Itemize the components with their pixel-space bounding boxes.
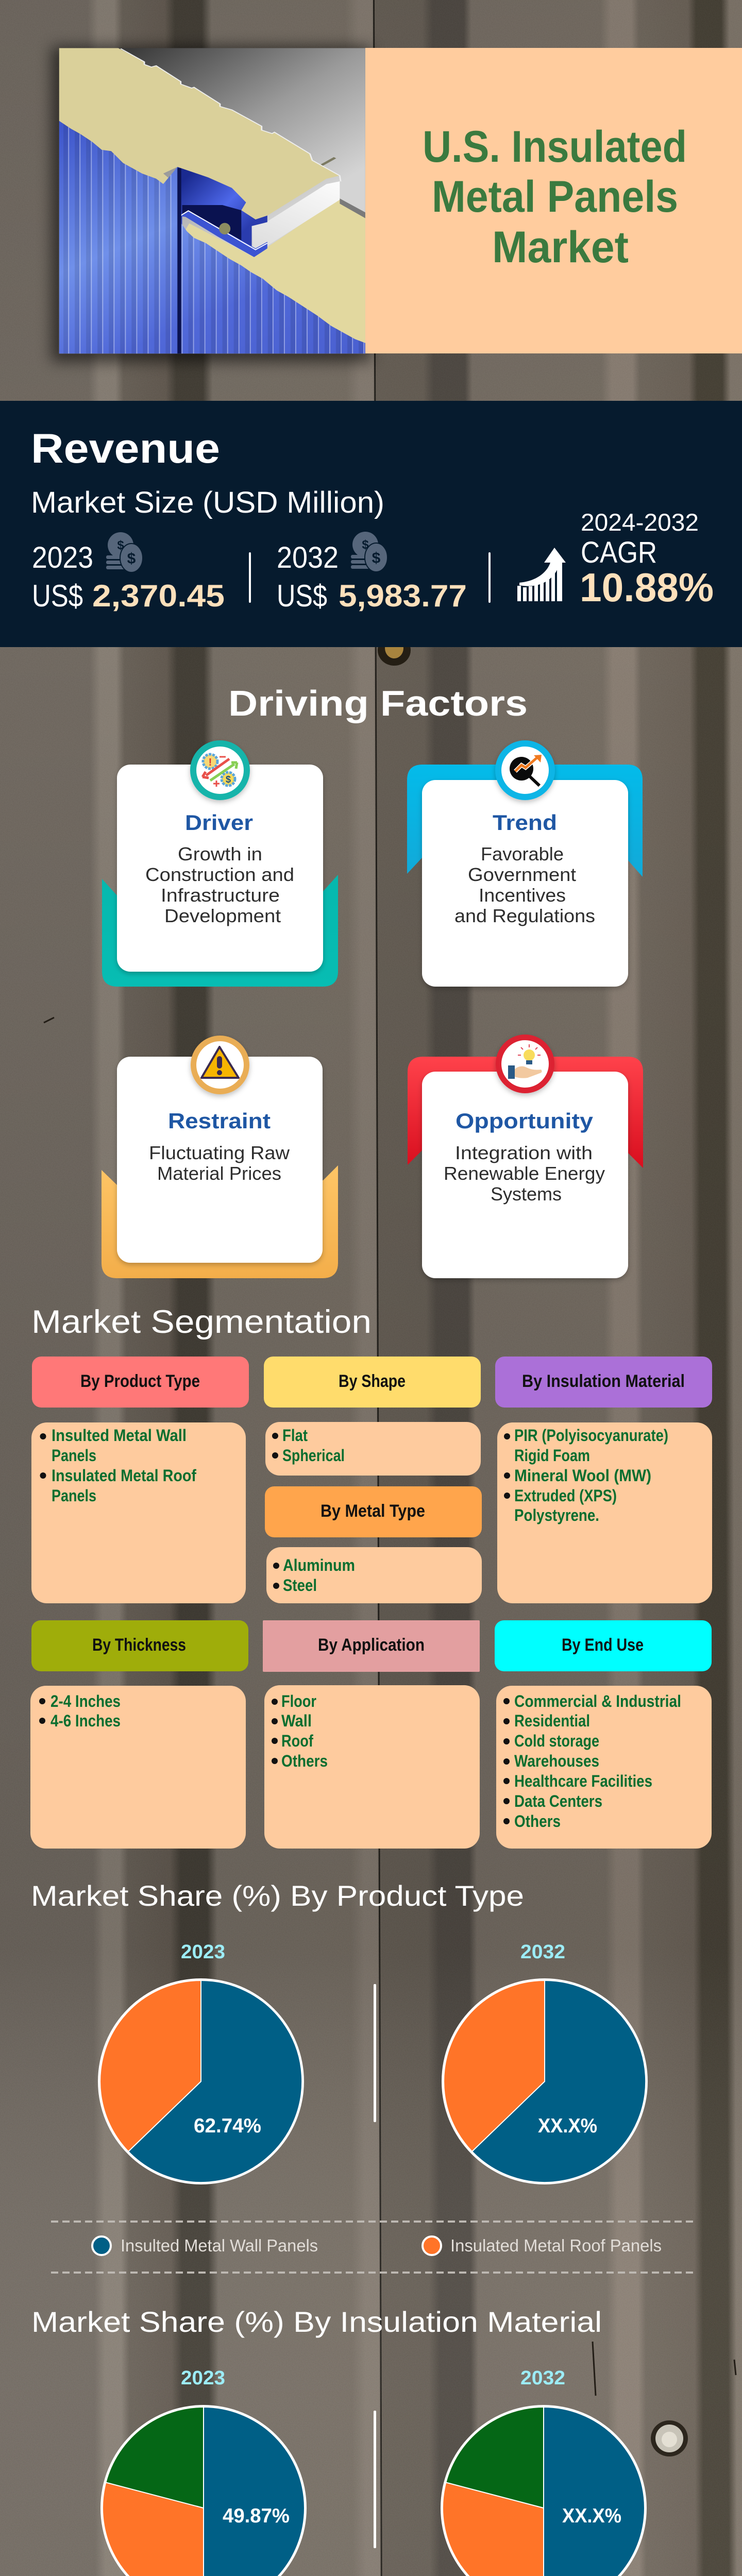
title text: Market: [492, 223, 629, 272]
list: end uses: Data Centers: [514, 1792, 602, 1810]
title text: [423, 122, 687, 272]
heading: market share by product type: Market Share (%) By Product Type: [31, 1879, 524, 1912]
icon: driver: !: [209, 757, 212, 768]
title background: [365, 48, 742, 353]
list: end uses: Others: [514, 1812, 561, 1831]
card: driver: [102, 740, 338, 987]
value 2023: 2,370.45: [92, 579, 225, 613]
label: by end use: By End Use: [562, 1635, 644, 1655]
list: applications: Floor: [281, 1692, 316, 1710]
card text: restraint: Fluctuating Raw: [149, 1142, 290, 1163]
list: applications: Roof: [281, 1732, 313, 1750]
card: restraint: [102, 1036, 338, 1278]
legend: product type: Insulted Metal Wall Panels: [121, 2236, 318, 2255]
cagr label: CAGR: [581, 536, 657, 569]
icon: coins 2032: $: [372, 550, 381, 567]
divider: [374, 2411, 376, 2548]
year label: 2023: 2023: [181, 1941, 225, 1963]
panel: by metal type: [265, 1486, 482, 1603]
list: insulation materials: Rigid Foam: [514, 1446, 590, 1465]
heading: market segmentation: Market Segmentation: [31, 1304, 372, 1340]
heading: driving factors: Driving Factors: [228, 683, 528, 723]
list: insulation materials: Mineral Wool (MW): [514, 1466, 651, 1485]
card text: restraint: [149, 1142, 290, 1184]
list: thickness: 2-4 Inches: [50, 1692, 121, 1710]
card text: trend: Favorable: [481, 843, 564, 865]
cagr period: 2024-2032: [581, 509, 699, 536]
pie chart: insulation material 2032: XX.X%: [562, 2505, 621, 2527]
panel: by end use: [495, 1620, 712, 1849]
card title: driver: Driver: [185, 810, 253, 835]
list: metal types: Aluminum: [283, 1556, 355, 1574]
label: by thickness: By Thickness: [92, 1635, 186, 1655]
card text: opportunity: [444, 1142, 605, 1205]
divider: [374, 1984, 376, 2122]
value 2032: US$: [277, 579, 327, 613]
list: product types: Insulted Metal Wall: [52, 1426, 187, 1445]
card: trend: [407, 740, 643, 987]
label: by metal type: By Metal Type: [321, 1501, 425, 1521]
icon: coins 2023: $: [117, 538, 124, 552]
legend: product type: [92, 2236, 662, 2255]
year label: 2032: 2032: [520, 1941, 565, 1963]
card text: driver: Construction and: [145, 864, 294, 885]
list: end uses: Healthcare Facilities: [514, 1772, 652, 1790]
title text: Metal Panels: [432, 172, 678, 222]
list: applications: [272, 1692, 328, 1770]
icon: trend: [495, 740, 555, 800]
pie chart: product type 2032: [442, 1978, 648, 2184]
legend: product type: Insulated Metal Roof Panels: [450, 2236, 662, 2255]
list: end uses: Residential: [514, 1711, 590, 1730]
card text: driver: [145, 843, 294, 926]
heading: revenue: Revenue: [31, 426, 220, 472]
list: applications: Others: [281, 1752, 328, 1770]
card text: trend: Incentives: [479, 885, 566, 906]
list: shapes: Spherical: [282, 1446, 345, 1465]
pie chart: insulation material 2023: [100, 2405, 307, 2576]
panel: by product type: [31, 1357, 249, 1603]
list: insulation materials: Polystyrene.: [514, 1506, 599, 1524]
list: end uses: Commercial & Industrial: [514, 1692, 681, 1710]
title text: U.S. Insulated: [423, 122, 687, 172]
list: product types: [40, 1426, 196, 1505]
card title: restraint: Restraint: [168, 1109, 271, 1133]
list: product types: Panels: [52, 1446, 96, 1465]
title image: insulated metal panel cutaway: [59, 48, 365, 353]
card text: trend: Government: [468, 864, 576, 885]
list: metal types: Steel: [283, 1576, 317, 1595]
label: by application: By Application: [318, 1635, 425, 1655]
value 2032: [277, 579, 467, 613]
divider: [488, 552, 491, 603]
heading: market share by insulation material: Market Share (%) By Insulation Material: [31, 2306, 602, 2338]
year label: 2032: 2032: [520, 2367, 565, 2389]
panel: by shape: [264, 1357, 481, 1476]
pie chart: insulation material 2032: [441, 2405, 647, 2576]
year 2023: 2023: [32, 541, 93, 574]
icon: driver: $: [226, 774, 231, 785]
pie chart: insulation material 2023: 49.87%: [223, 2505, 290, 2527]
label: by product type: By Product Type: [80, 1371, 200, 1391]
value 2032: 5,983.77: [339, 579, 467, 613]
title panel: [52, 46, 742, 362]
subheading: market size: Market Size (USD Million): [31, 486, 384, 519]
panel: by application: [263, 1620, 480, 1849]
list: product types: Panels: [52, 1486, 96, 1505]
value 2023: [32, 579, 225, 613]
pie chart: product type 2023: [98, 1978, 304, 2184]
list: shapes: [272, 1426, 345, 1465]
icon: coins 2032: $: [362, 538, 369, 552]
card text: opportunity: Systems: [491, 1183, 562, 1205]
list: product types: Insulated Metal Roof: [52, 1466, 196, 1485]
list: insulation materials: PIR (Polyisocyanurate): [514, 1426, 668, 1445]
card text: trend: and Regulations: [454, 905, 595, 926]
label: by shape: By Shape: [339, 1371, 406, 1391]
icon: growth chart: [517, 548, 566, 601]
icon: driver: [190, 740, 250, 800]
list: applications: Wall: [281, 1711, 312, 1730]
card title: trend: Trend: [493, 810, 557, 835]
list: end uses: Warehouses: [514, 1752, 599, 1770]
list: metal types: [273, 1556, 355, 1595]
icon: opportunity: [496, 1035, 554, 1093]
card title: opportunity: Opportunity: [456, 1109, 594, 1133]
list: thickness: 4-6 Inches: [50, 1711, 121, 1730]
card: opportunity: [408, 1035, 643, 1278]
card text: opportunity: Integration with: [455, 1142, 593, 1163]
value 2023: US$: [32, 579, 83, 613]
panel: by thickness: [30, 1620, 248, 1849]
list: insulation materials: [504, 1426, 668, 1524]
icon: restraint: [191, 1036, 249, 1094]
card text: restraint: Material Prices: [157, 1163, 281, 1184]
list: thickness: [39, 1692, 121, 1730]
list: end uses: Cold storage: [514, 1732, 599, 1750]
icon: coins 2023: $: [127, 550, 136, 567]
cagr value: 10.88%: [580, 565, 714, 610]
panel: by insulation material: [495, 1357, 712, 1603]
pie chart: product type 2023: 62.74%: [194, 2115, 261, 2137]
list: shapes: Flat: [282, 1426, 308, 1445]
list: insulation materials: Extruded (XPS): [514, 1486, 617, 1505]
icon: coins 2023: [106, 532, 143, 572]
divider: [249, 552, 251, 603]
card text: opportunity: Renewable Energy: [444, 1163, 605, 1184]
card text: driver: Growth in: [178, 843, 262, 865]
pie chart: product type 2032: XX.X%: [538, 2115, 597, 2137]
card text: driver: Infrastructure: [161, 885, 280, 906]
year 2032: 2032: [277, 541, 339, 574]
label: by insulation material: By Insulation Material: [522, 1371, 685, 1391]
panel: revenue band: [0, 401, 742, 647]
card text: driver: Development: [164, 905, 281, 926]
card text: trend: [454, 843, 595, 926]
year label: 2023: 2023: [181, 2367, 225, 2389]
list: end uses: [503, 1692, 681, 1831]
icon: coins 2032: [351, 532, 387, 572]
